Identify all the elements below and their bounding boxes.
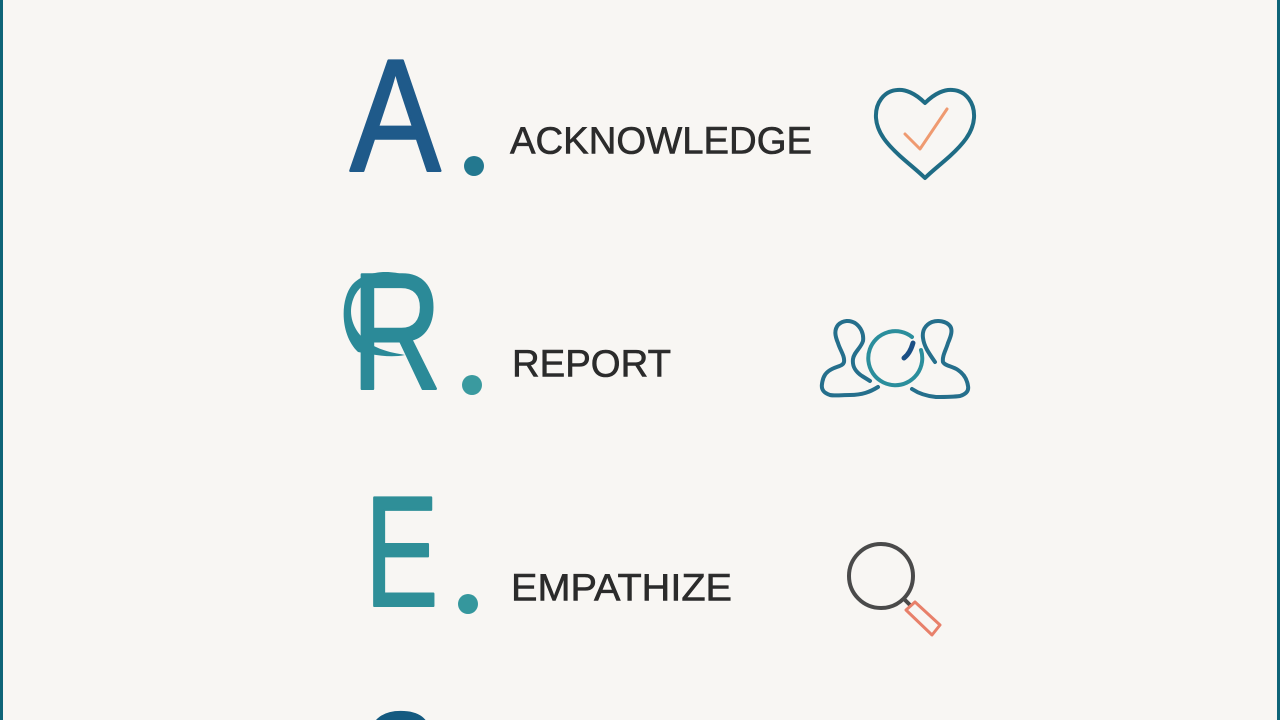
label: report: REPORT: [512, 344, 671, 386]
letter A: A: [350, 27, 441, 205]
label: acknowledge: ACKNOWLEDGE: [510, 120, 812, 162]
dot R: [462, 375, 482, 395]
icon: people with circle: [822, 321, 968, 397]
row: acknowledge: [350, 27, 974, 205]
letter R: R: [351, 240, 442, 425]
row: report: [344, 240, 968, 425]
icon: heart with check: [876, 90, 974, 178]
right border: [1277, 0, 1280, 720]
dot E: [458, 594, 478, 614]
icon: magnifying glass: [849, 544, 940, 635]
dot A: [464, 156, 484, 176]
row: empathize: [365, 463, 940, 639]
letter E: E: [365, 463, 438, 639]
label: empathize: EMPATHIZE: [511, 568, 732, 610]
left border: [0, 0, 3, 720]
